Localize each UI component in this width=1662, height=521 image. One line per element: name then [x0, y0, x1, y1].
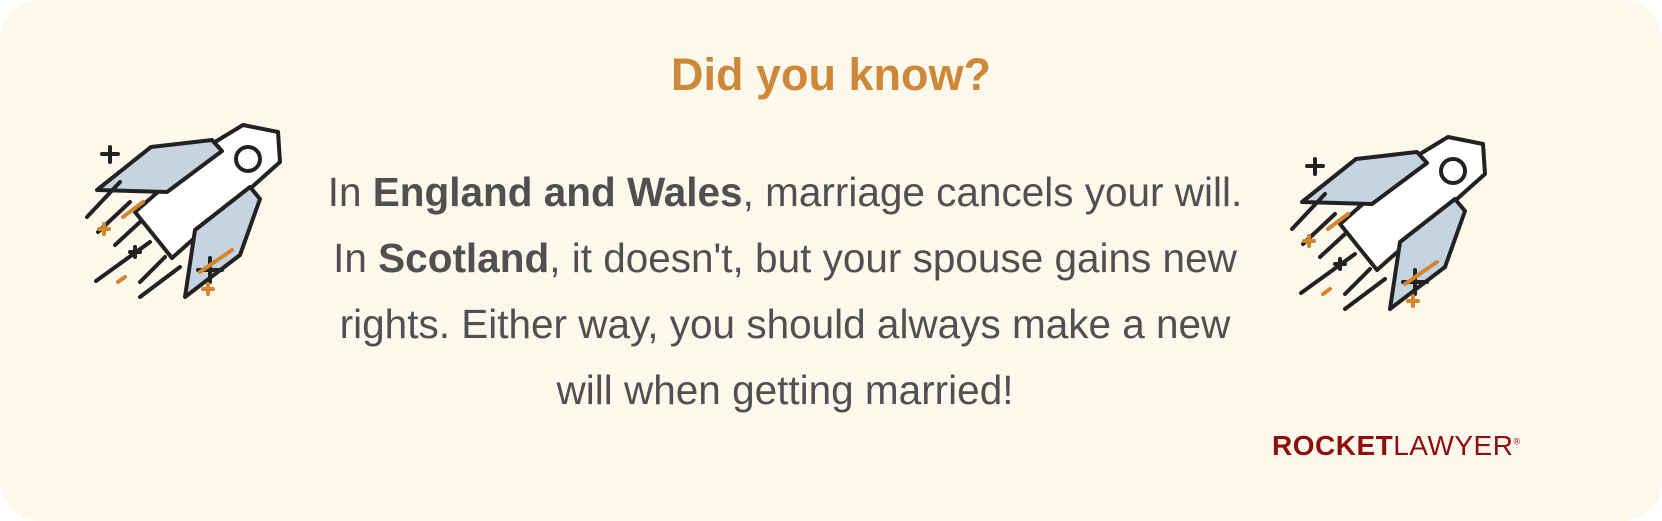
- icon: rocket right: [1292, 137, 1485, 309]
- main text: rights. Either way, you should always make a new: [340, 301, 1230, 347]
- logo: ROCKETLAWYER®: [1272, 430, 1521, 461]
- main text: In England and Wales, marriage cancels your will.: [328, 169, 1242, 215]
- main text: will when getting married!: [557, 367, 1013, 413]
- title: Did you know?: [671, 49, 991, 100]
- icon: rocket left: [87, 125, 280, 297]
- main text: [328, 169, 1242, 413]
- main text: In Scotland, it doesn't, but your spouse gains new: [333, 235, 1237, 281]
